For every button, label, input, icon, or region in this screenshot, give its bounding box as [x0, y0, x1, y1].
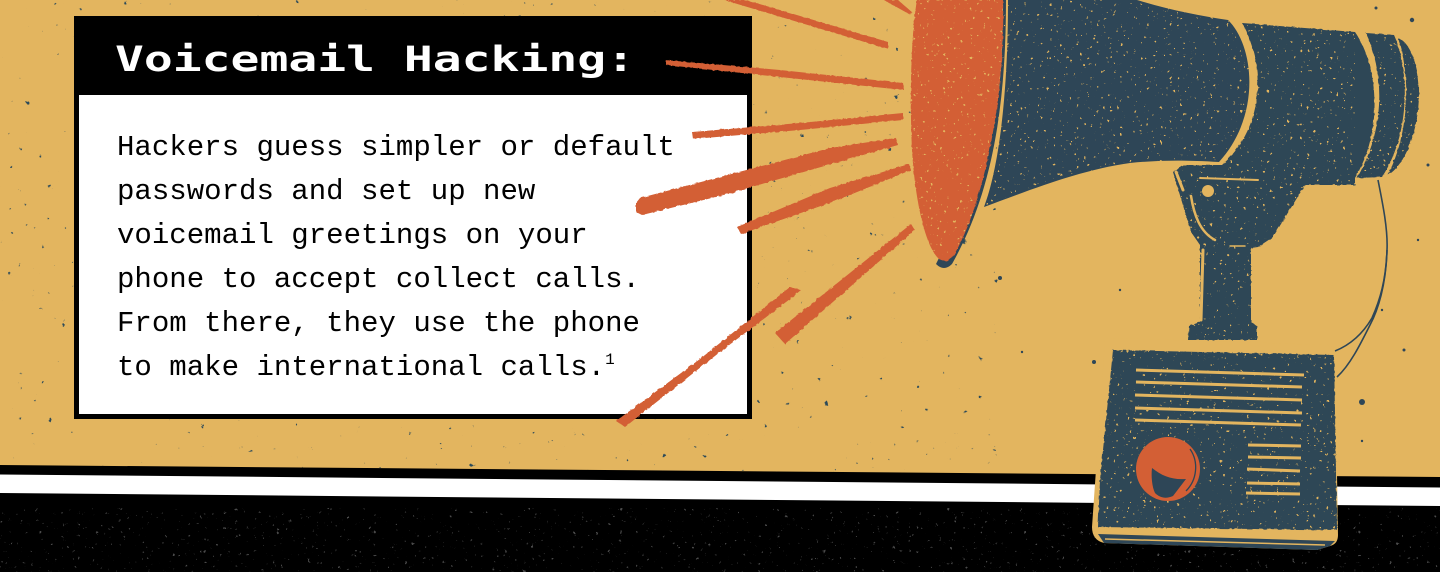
horn interior speckle: [910, 0, 1002, 254]
ink flecks on right background: [998, 6, 1430, 442]
box lower edge: [1098, 534, 1335, 550]
box face speckle: [1095, 348, 1340, 533]
diagonal black and white band: [0, 465, 1440, 572]
driver housing and mount: [1173, 23, 1375, 340]
cable: [1335, 180, 1387, 377]
box casing: [1092, 338, 1338, 550]
panel frame: [74, 16, 752, 419]
sound rays: [616, 0, 915, 427]
bracket highlights: [1176, 172, 1258, 320]
body text: voicemail greetings on your: [117, 219, 588, 252]
body text: passwords and set up new: [117, 175, 536, 208]
panel: voicemail hacking: [74, 16, 752, 419]
bracket bolt: [1202, 185, 1214, 197]
icon: megaphone: [905, 0, 1425, 550]
control box: [1092, 338, 1340, 550]
horn rim shadow: [936, 0, 1006, 268]
body text: Hackers guess simpler or default: [117, 131, 675, 164]
panel body: [79, 95, 747, 414]
grille lines: [1135, 370, 1304, 494]
body text: From there, they use the phone: [117, 307, 640, 340]
body text: phone to accept collect calls.: [117, 263, 640, 296]
body text: [117, 131, 675, 384]
box face: [1098, 350, 1337, 530]
rear cap: [1357, 33, 1405, 178]
body text: to make international calls.: [117, 351, 605, 384]
icon: round orange dial: [1136, 437, 1200, 501]
body text: 1: [605, 351, 615, 369]
heading: Voicemail Hacking:: [115, 40, 635, 80]
horn cone: [984, 0, 1249, 207]
body speckle: [980, 0, 1425, 345]
ink flecks on background: [0, 0, 1000, 480]
horn interior: [911, 0, 1003, 261]
rear cap edge: [1388, 38, 1419, 175]
